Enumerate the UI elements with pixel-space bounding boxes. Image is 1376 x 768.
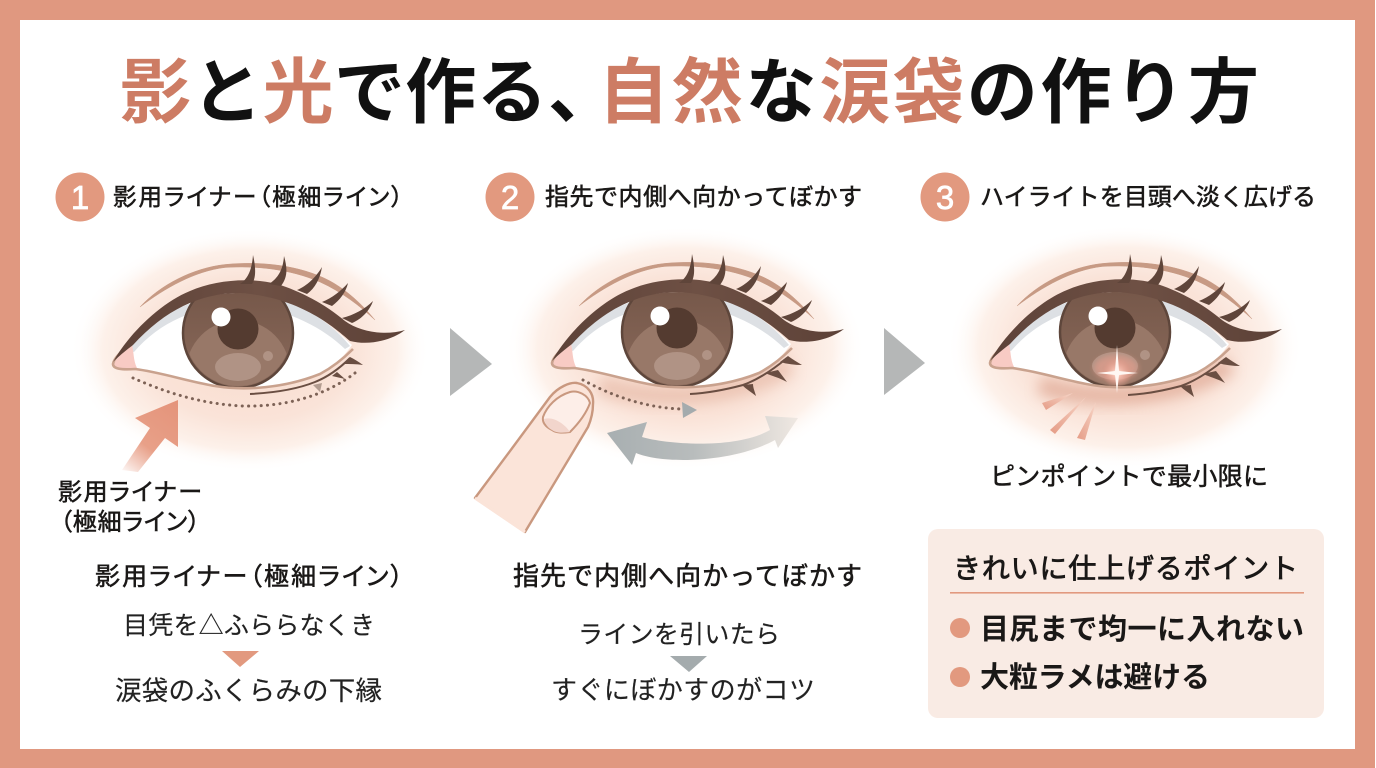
next arrow 1 bbox=[450, 328, 492, 396]
pinpoint label: ピンポイントで最小限に bbox=[990, 463, 1268, 491]
step 1 heading: 影用ライナー（極細ライン） bbox=[113, 184, 403, 210]
down triangle gray bbox=[670, 656, 707, 672]
step 3 heading bbox=[920, 172, 1316, 222]
eye illustration: step 3 bbox=[947, 225, 1303, 469]
step 1 heading: 1 bbox=[71, 179, 89, 216]
eye illustration: step 2 bbox=[505, 226, 865, 470]
arrow: pointing to liner bbox=[122, 400, 178, 472]
panel: finishing points bbox=[928, 529, 1324, 718]
bullet 1: 目尻まで均一に入れない bbox=[980, 613, 1304, 646]
title: 影と光で作る、 bbox=[120, 54, 619, 133]
down triangle bbox=[222, 651, 259, 667]
step 2 description: すぐにぼかすのがコツ bbox=[551, 675, 815, 705]
step 1 description: 目凭を△ふららなくき bbox=[123, 612, 375, 640]
step 2 description: 指先で内側へ向かってぼかす bbox=[513, 561, 862, 591]
liner callout label bbox=[58, 479, 202, 536]
eye illustration: step 1 bbox=[70, 228, 430, 472]
sparkle highlight bbox=[1094, 345, 1138, 393]
step 3 heading: ハイライトを目頭へ淡く広げる bbox=[980, 184, 1316, 211]
bullet 2: 大粒ラメは避ける bbox=[980, 661, 1210, 694]
step 1 description: 涙袋のふくらみの下縁 bbox=[115, 676, 382, 706]
highlight rays bbox=[1042, 393, 1096, 440]
title: 自然な涙袋の作り方 bbox=[598, 54, 1262, 133]
finger bbox=[475, 383, 593, 532]
step 3 heading: 3 bbox=[936, 179, 954, 216]
step 2 description: ラインを引いたら bbox=[578, 621, 780, 649]
next arrow 2 bbox=[884, 328, 925, 395]
step 1 description: 影用ライナー（極細ライン） bbox=[95, 563, 403, 591]
title bbox=[120, 54, 1262, 133]
step 2 heading bbox=[486, 172, 862, 222]
step 2 heading: 指先で内側へ向かってぼかす bbox=[545, 184, 862, 211]
panel: finishing points: きれいに仕上げるポイント bbox=[953, 553, 1298, 584]
step 2 heading: 2 bbox=[501, 179, 519, 216]
double-headed blend arrow bbox=[607, 416, 798, 465]
step 1 description bbox=[95, 563, 403, 706]
liner callout label: 影用ライナー bbox=[58, 479, 202, 506]
liner callout label: （極細ライン） bbox=[60, 509, 200, 536]
step 2 description bbox=[513, 561, 862, 705]
step 1 heading bbox=[56, 172, 403, 222]
